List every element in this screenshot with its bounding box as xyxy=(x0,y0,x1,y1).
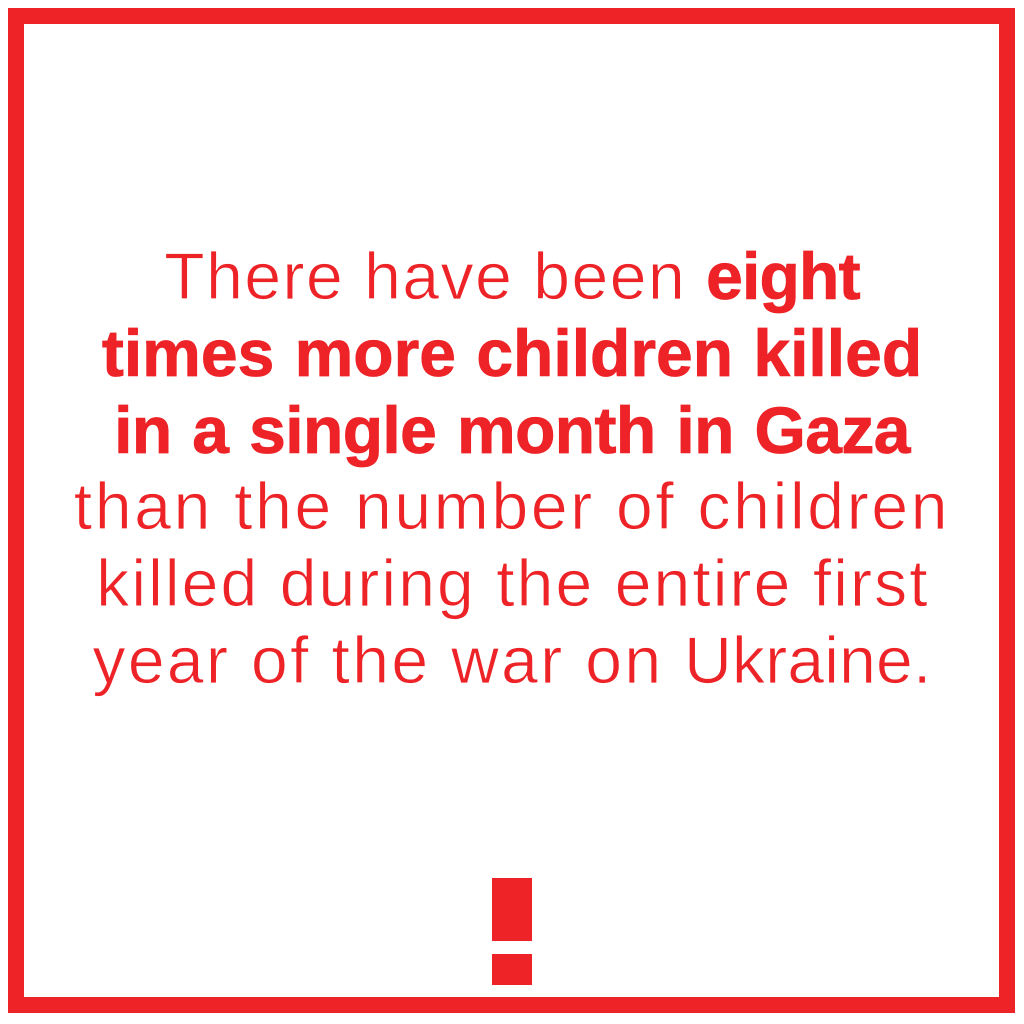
main statement text: killed during the entire first xyxy=(96,546,930,620)
icon: exclamation mark xyxy=(492,878,532,985)
main statement text: in a single month in Gaza xyxy=(114,393,910,467)
main statement text xyxy=(74,239,950,697)
main statement text: year of the war on Ukraine. xyxy=(92,623,932,697)
main statement text: than the number of children xyxy=(74,469,950,543)
main statement text: times more children killed xyxy=(102,316,922,390)
main statement text: There have been eight xyxy=(164,239,860,313)
